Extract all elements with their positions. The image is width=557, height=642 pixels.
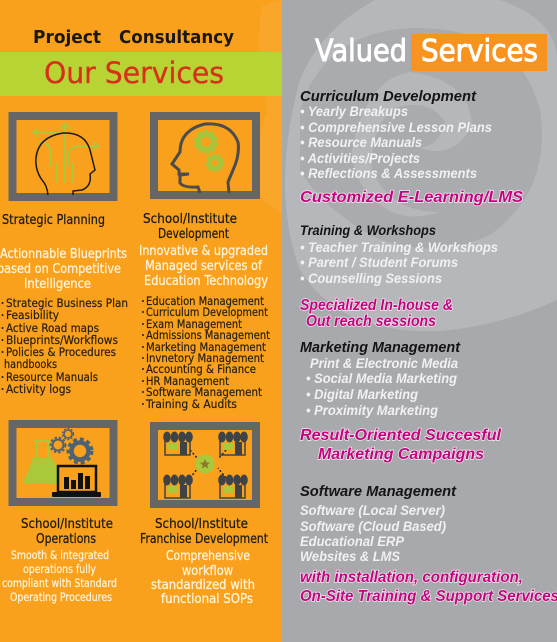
text: Operations description: Operating Procedures (10, 590, 112, 604)
section: Software Management: Software (Local Server) (300, 503, 445, 518)
title: Operations (21, 517, 113, 547)
text: Development description (139, 244, 268, 289)
block: Strategic Planning (0, 213, 128, 396)
title: Franchise Development (140, 517, 268, 547)
title: Strategic Planning: Strategic Planning (2, 213, 105, 228)
callout: installation and support: with installation, configuration, (300, 569, 523, 586)
text: Operations description: Smooth & integrated (11, 548, 109, 562)
section: Software Management: Websites & LMS (300, 549, 400, 564)
callout: Result-Oriented campaigns (300, 427, 502, 463)
heading: Valued Services: Services (421, 34, 538, 69)
text: Strategic Planning description: based on Competitive (0, 262, 121, 277)
text: Strategic Planning description: Intelligence (24, 277, 91, 292)
list: Strategic Planning items: Policies & Procedures (6, 345, 116, 359)
text: Operations description (2, 548, 117, 604)
list: Strategic Planning items: Active Road maps (6, 321, 99, 335)
text: Franchise description: Comprehensive (166, 549, 250, 564)
text: Operations description: compliant with Standard (2, 576, 117, 590)
callout: Result-Oriented campaigns: Marketing Campaigns (318, 446, 484, 463)
list: Development items (142, 294, 270, 411)
section: Training & Workshops: • Counselling Sessions (300, 271, 442, 286)
list: Strategic Planning items: handbooks (4, 357, 57, 371)
text: Franchise description (151, 549, 255, 607)
list: Development items: Exam Management (146, 317, 242, 331)
text: Strategic Planning description (0, 247, 127, 292)
title: Franchise Development: School/Institute (155, 517, 248, 532)
callout: Customized E-Learning/LMS: Customized E-Learning/LMS (300, 189, 523, 206)
text: Strategic Planning description: Actionnable Blueprints (0, 247, 127, 262)
text: Development description: Education Technology (144, 274, 268, 289)
title: School/Institute Development (143, 212, 237, 242)
text: Franchise description: functional SOPs (161, 592, 253, 607)
title: Operations: Operations (36, 532, 96, 547)
callout: Specialized sessions: Out reach sessions (306, 313, 436, 330)
section: Marketing Management: Marketing Management (300, 339, 461, 356)
list: Strategic Planning items (2, 296, 128, 396)
section: Curriculum Development (300, 88, 492, 181)
heading: Valued Services (315, 34, 547, 71)
callout: Specialized sessions: Specialized In-house & (300, 297, 453, 314)
icon: operations flask, gears and laptop (12, 424, 114, 502)
list: Development items: Curriculum Development (146, 305, 268, 319)
section: Curriculum Development: • Reflections & Assessments (300, 166, 477, 181)
list: Development items: Accounting & Finance (146, 362, 256, 376)
section: Training & Workshops: • Parent / Student Forums (300, 255, 458, 270)
section: Marketing Management: • Digital Marketing (306, 387, 419, 402)
list: Strategic Planning items: Feasibility (6, 308, 59, 322)
section: Training & Workshops: Training & Workshops (300, 222, 436, 238)
panel: left orange background (0, 0, 282, 642)
title: Operations: School/Institute (21, 517, 113, 532)
text: Development description: Managed services of (145, 259, 262, 274)
section: Marketing Management (300, 339, 461, 418)
title: School/Institute Development: Development (158, 227, 229, 242)
block: School/Institute Development (139, 212, 270, 411)
title: School/Institute Development: School/Institute (143, 212, 237, 227)
section: Software Management: Educational ERP (300, 534, 405, 549)
list: Development items: Training & Audits (145, 397, 237, 411)
icon: strategic planning head (12, 116, 114, 197)
list: Development items: Education Management (146, 294, 264, 308)
section: Curriculum Development: • Comprehensive Lesson Plans (300, 120, 492, 135)
list: Development items: Marketing Management (146, 340, 266, 354)
panel: right grey background (282, 0, 557, 642)
heading: Project Consultancy: Project (33, 27, 101, 48)
callout: installation and support (300, 569, 557, 605)
heading band: Our Services: Our Services (44, 56, 224, 90)
list: Strategic Planning items: Activity logs (6, 382, 71, 396)
section: Marketing Management: • Proximity Marketing (306, 403, 439, 418)
icon: development head with gears (154, 116, 256, 195)
text: Operations description: operations fully (23, 562, 96, 576)
callout: Result-Oriented campaigns: Result-Oriented Succesful (300, 427, 502, 444)
heading: Project Consultancy: Consultancy (119, 27, 234, 48)
section: Curriculum Development: • Resource Manuals (300, 135, 422, 150)
block: Franchise Development (140, 517, 268, 607)
section: Curriculum Development: Curriculum Development (300, 88, 477, 105)
callout: Specialized sessions (300, 297, 453, 330)
section: Curriculum Development: • Yearly Breakups (300, 104, 408, 119)
title: Franchise Development: Franchise Development (140, 532, 268, 547)
text: Franchise description: standardized with (151, 578, 255, 593)
section: Software Management (300, 483, 457, 564)
list: Strategic Planning items: Strategic Business Plan (6, 296, 128, 310)
list: Strategic Planning items: Resource Manuals (6, 370, 98, 384)
list: Development items: Software Management (146, 385, 262, 399)
list: Development items: HR Management (146, 374, 229, 388)
list: Development items: Invnetory Management (146, 351, 264, 365)
list: Strategic Planning items: Blueprints/Workflows (6, 333, 118, 347)
heading: Project Consultancy (33, 27, 234, 48)
heading: Valued Services: Valued (315, 34, 407, 69)
list: Development items: Admissions Management (146, 328, 270, 342)
icon: franchise shops network (154, 426, 256, 504)
section: Training & Workshops: • Teacher Training & Workshops (300, 240, 498, 255)
section: Training & Workshops (300, 222, 498, 286)
section: Software Management: Software Management (300, 483, 457, 500)
section: Marketing Management: Print & Electronic Media (310, 356, 458, 371)
text: Development description: Innovative & upgraded (139, 244, 268, 259)
block: School/Institute Operations (2, 517, 117, 604)
section: Software Management: Software (Cloud Based) (300, 519, 446, 534)
section: Marketing Management: • Social Media Marketing (306, 371, 458, 386)
section: Curriculum Development: • Activities/Projects (300, 151, 420, 166)
heading band: Our Services (0, 52, 282, 96)
text: Franchise description: workflow (182, 564, 233, 579)
